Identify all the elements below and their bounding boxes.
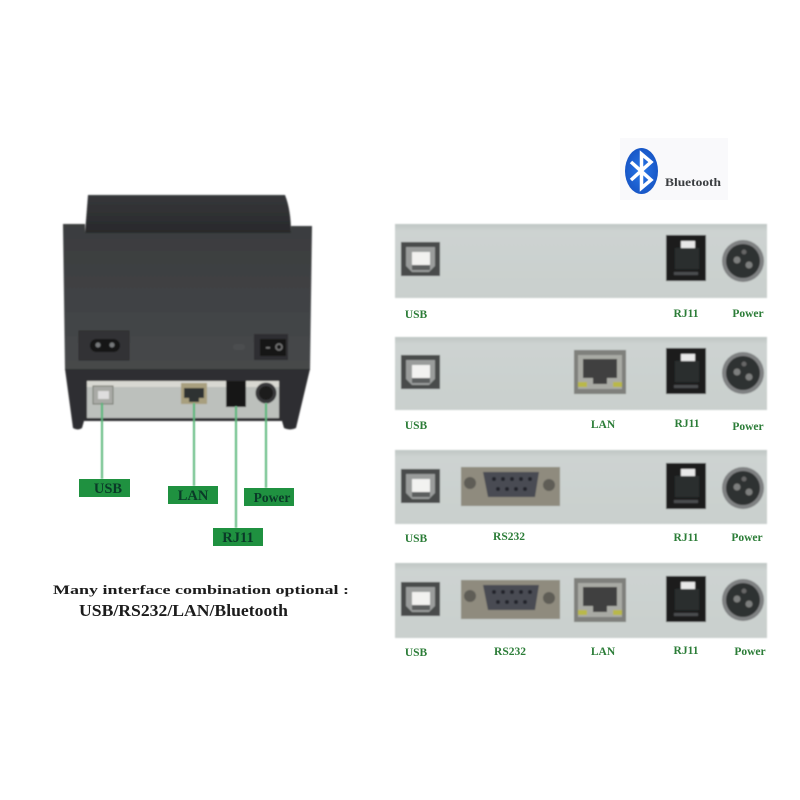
port labels: RJ11 xyxy=(674,308,699,320)
port labels xyxy=(405,308,764,321)
printer rear photo xyxy=(63,195,312,430)
label: RJ11 xyxy=(213,528,263,546)
printer lid xyxy=(85,195,291,233)
port labels: USB xyxy=(405,647,428,659)
AC power inlet xyxy=(79,331,129,360)
port labels: RS232 xyxy=(493,531,525,543)
caption line 1: Many interface combination optional : xyxy=(53,582,349,597)
port: RJ11 xyxy=(666,348,706,394)
port: RS232 xyxy=(461,467,560,506)
printer body xyxy=(63,224,312,370)
port: USB xyxy=(401,242,440,276)
port: Power xyxy=(722,352,764,394)
port labels: RJ11 xyxy=(675,418,700,430)
port: USB xyxy=(401,355,440,389)
printer USB port xyxy=(93,386,113,404)
port labels xyxy=(405,418,764,433)
caption line 2: USB/RS232/LAN/Bluetooth xyxy=(79,601,289,620)
port: RJ11 xyxy=(666,235,706,281)
port: Power xyxy=(722,579,764,621)
port labels: USB xyxy=(405,533,428,545)
port labels: Power xyxy=(732,308,764,320)
panel: USB RS232 LAN RJ11 Power xyxy=(395,563,767,659)
port bay xyxy=(87,381,279,418)
label: LAN: LAN xyxy=(178,488,209,504)
port labels: Power xyxy=(734,646,766,658)
bluetooth text: Bluetooth xyxy=(665,177,722,189)
printer LAN port xyxy=(181,383,207,404)
label: LAN xyxy=(168,486,218,504)
port: Power xyxy=(722,240,764,282)
port: LAN xyxy=(574,350,626,394)
port labels: Power xyxy=(731,532,763,544)
port: USB xyxy=(401,469,440,503)
port labels: LAN xyxy=(591,419,616,431)
on/off mark xyxy=(233,344,245,350)
label: Power xyxy=(244,488,294,506)
port: RJ11 xyxy=(666,463,706,509)
panel: USB RJ11 Power xyxy=(395,224,767,321)
port labels: RJ11 xyxy=(674,532,699,544)
label: USB: USB xyxy=(94,481,122,497)
connector lines xyxy=(102,403,266,528)
printer power port xyxy=(256,382,276,404)
port: USB xyxy=(401,582,440,616)
port: RJ11 xyxy=(666,576,706,622)
panel: USB RS232 RJ11 Power xyxy=(395,450,767,545)
port: RS232 xyxy=(461,580,560,619)
port labels: RJ11 xyxy=(674,645,699,657)
label: USB xyxy=(79,479,130,497)
port labels xyxy=(405,645,766,659)
port: Power xyxy=(722,467,764,509)
bluetooth badge xyxy=(620,138,728,200)
port labels xyxy=(405,531,763,545)
panel: USB LAN RJ11 Power xyxy=(395,337,767,433)
port labels: LAN xyxy=(591,646,616,658)
port labels: Power xyxy=(732,421,764,433)
port labels: RS232 xyxy=(494,646,526,658)
label: Power: Power xyxy=(254,490,290,505)
port labels: USB xyxy=(405,309,428,321)
printer RJ11 port xyxy=(226,381,246,407)
port labels: USB xyxy=(405,420,428,432)
icon: bluetooth xyxy=(625,148,658,194)
label: RJ11: RJ11 xyxy=(222,530,254,546)
power switch xyxy=(254,334,288,360)
printer lower section xyxy=(65,369,310,430)
port: LAN xyxy=(574,578,626,622)
